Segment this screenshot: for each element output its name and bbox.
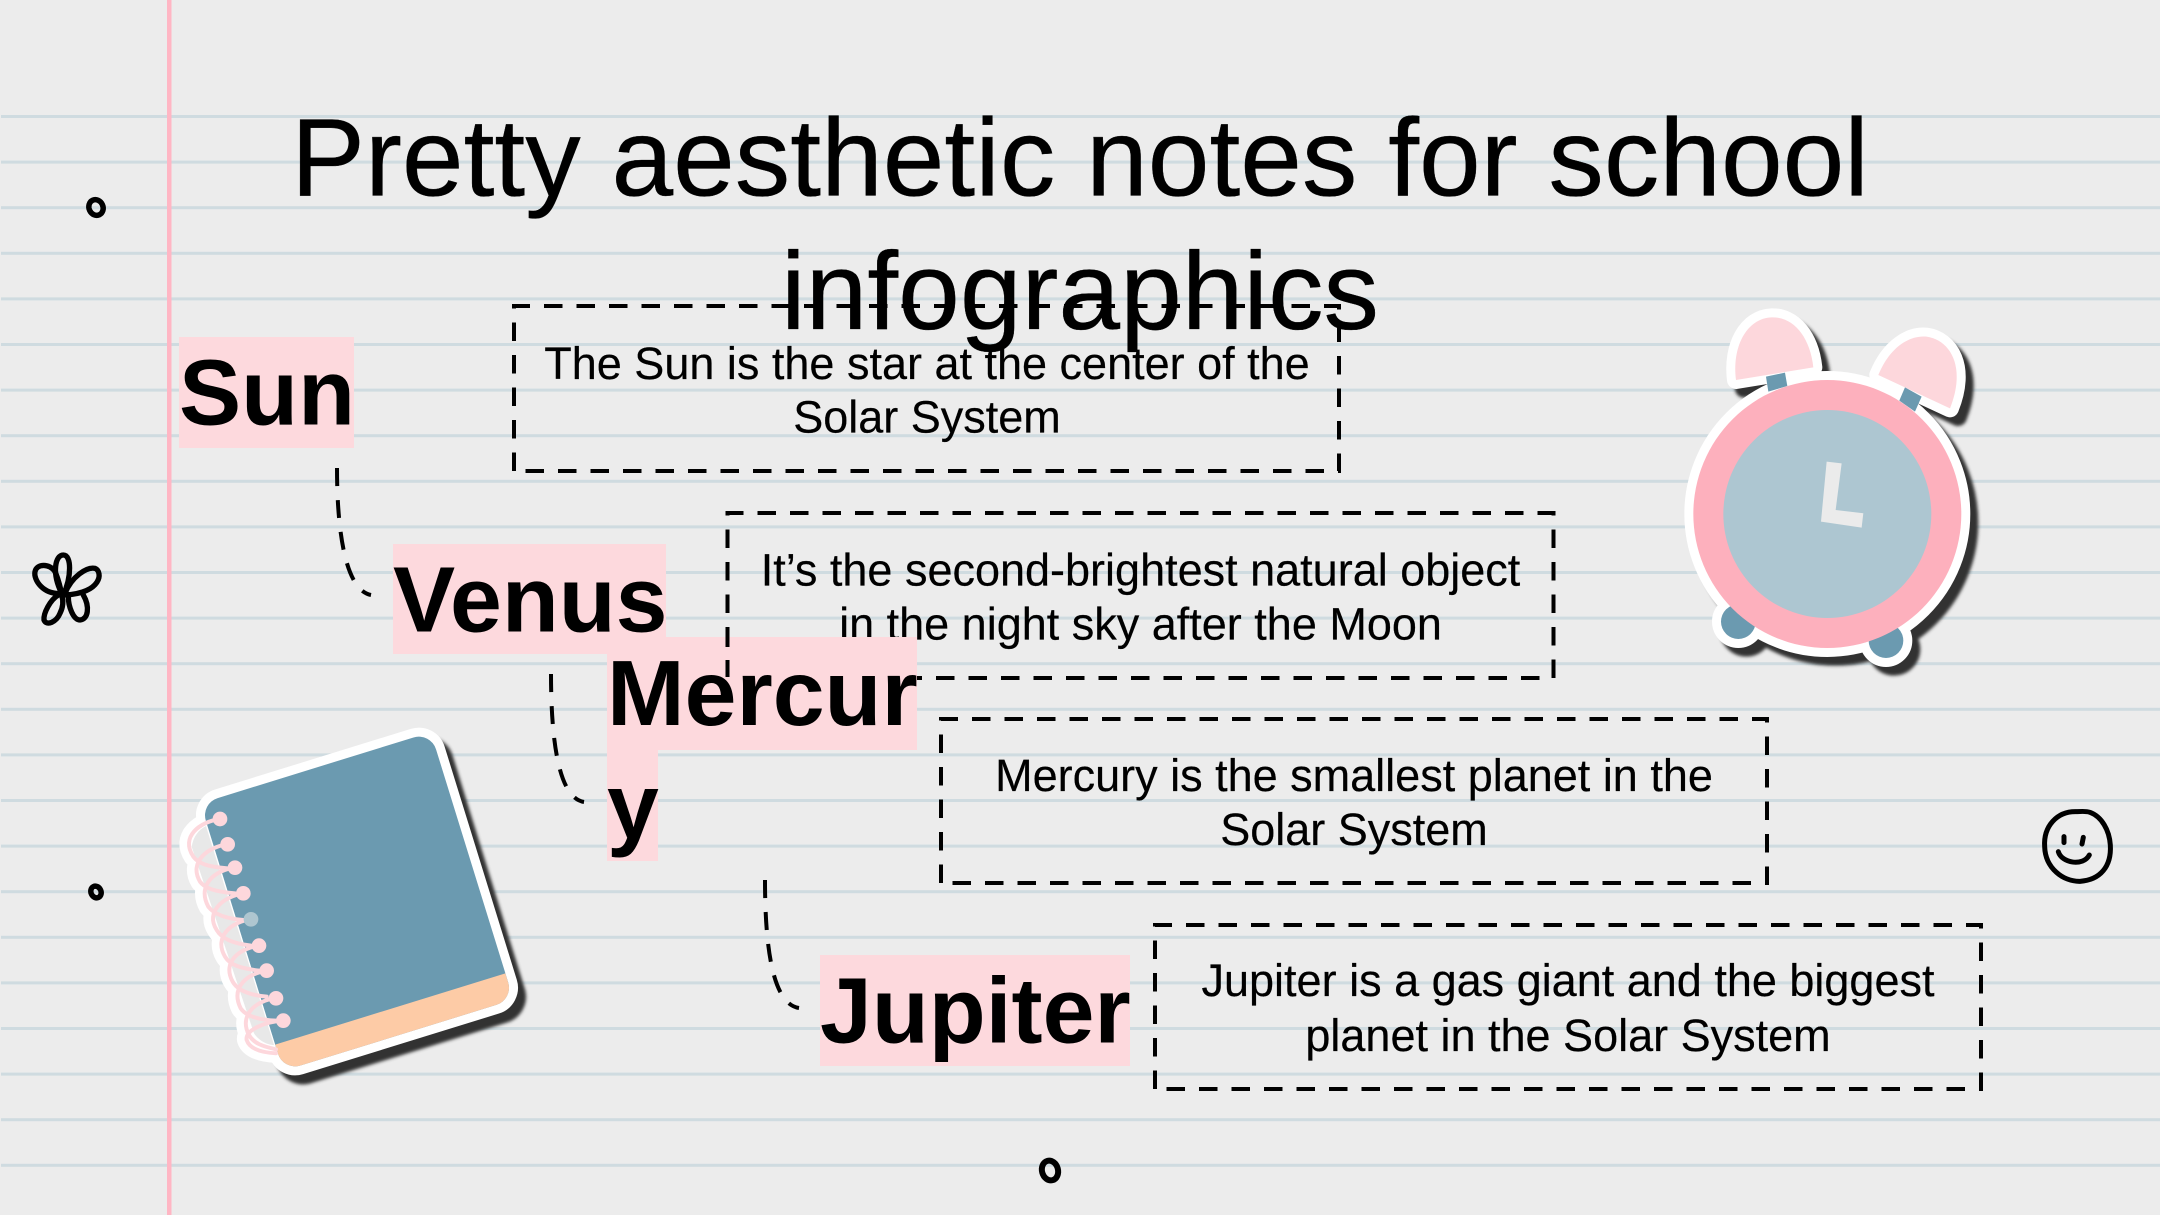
description box: Venus bbox=[728, 513, 1554, 678]
doodle: smiley face bbox=[2045, 811, 2110, 881]
description box: Jupiter: Jupiter is a gas giant and the biggest bbox=[1202, 955, 1935, 1006]
description box: Jupiter: planet in the Solar System bbox=[1305, 1010, 1831, 1061]
label: Sun: Sun bbox=[179, 340, 355, 444]
icon: notebook sticker bbox=[189, 732, 522, 1080]
doodle: flower bbox=[35, 555, 99, 623]
label: Venus: Venus bbox=[393, 548, 668, 652]
title: infographics bbox=[781, 229, 1379, 353]
description box: Sun: Solar System bbox=[793, 392, 1061, 442]
description box: Sun bbox=[514, 306, 1339, 471]
description box: Mercury: Mercury is the smallest planet in the bbox=[995, 750, 1713, 801]
icon: alarm clock sticker bbox=[1693, 317, 1969, 667]
description box: Mercury bbox=[941, 719, 1767, 883]
label: Mercury bbox=[607, 637, 918, 861]
description box: Venus: in the night sky after the Moon bbox=[839, 598, 1442, 650]
connector: Venus to Mercury bbox=[551, 674, 584, 802]
connector: Mercury to Jupiter bbox=[765, 880, 799, 1008]
description box: Venus: It’s the second-brightest natural object bbox=[761, 544, 1521, 596]
label: Mercury: y bbox=[607, 754, 659, 858]
description box: Mercury: Solar System bbox=[1220, 804, 1488, 855]
description box: Sun: The Sun is the star at the center of the bbox=[544, 338, 1310, 389]
doodle: small circle top left bbox=[86, 197, 106, 218]
label: Mercury: Mercur bbox=[607, 641, 918, 745]
doodle: small circle bottom bbox=[1040, 1159, 1060, 1182]
label: Jupiter: Jupiter bbox=[820, 958, 1131, 1062]
title bbox=[291, 96, 1869, 353]
title: Pretty aesthetic notes for school bbox=[291, 96, 1869, 220]
description box: Jupiter bbox=[1155, 925, 1981, 1089]
connector: Sun to Venus bbox=[337, 468, 371, 595]
doodle: small circle middle left bbox=[89, 884, 103, 900]
